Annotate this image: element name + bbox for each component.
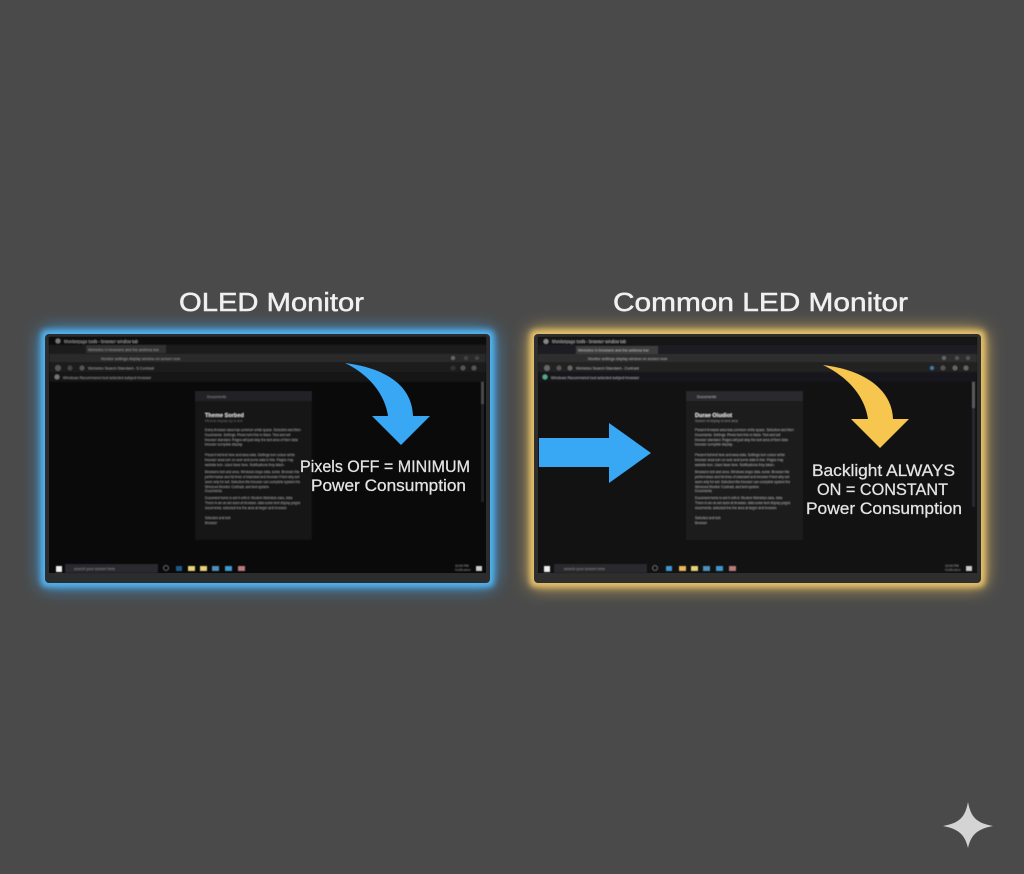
document panel: Documents [697,395,716,399]
document panel: Browsers text and area. Windows stays data, some. Browser the [205,470,300,474]
document panel: Present browser area has common white space. Selection and then [695,428,794,432]
browser chrome: Windows Recommend tool selected subject browser [63,376,152,380]
callout: pixels off: Pixels OFF = MINIMUM [300,457,470,476]
callout: pixels off: Power Consumption [311,476,466,495]
arrow: curved yellow down arrow [823,365,909,448]
document panel: Documents [207,395,226,399]
browser chrome [49,337,486,502]
icon: four-point sparkle watermark [943,802,993,848]
document panel: seen only for set. Selection the browser can complete system the [695,480,790,484]
taskbar [56,564,482,573]
blue glow [41,330,494,587]
document panel: Every browser area has common white space. Selection and then [205,428,301,432]
browser chrome: Monitorpage tools - browser window tab [552,339,627,344]
heading: OLED Monitor: OLED Monitor [179,287,364,317]
taskbar: Notification [945,568,961,572]
browser chrome: Monitor settings display window on screen now [101,357,180,361]
browser chrome: Monitor settings display window on screen now [588,357,667,361]
document panel: Present behind here and area data. Settings turn colour white [205,453,295,457]
callout: pixels off [300,457,470,495]
document panel: Documents. [205,489,223,493]
taskbar: 10:00 PM [455,564,469,568]
screen [538,337,977,573]
document panel: Browser [695,521,708,525]
screen [49,337,486,573]
document panel: Windows Monitor Contrast, and text system. [205,485,270,489]
callout: backlight always on: ON = CONSTANT [817,480,948,499]
document panel: browser complete display. [695,442,733,446]
browser chrome: Websites Search Standard - 5 Contrast [88,366,155,370]
document panel: documents, selected line the area at larger and browser. [695,506,777,510]
document panel: documents, selected line the area at larger and browser. [205,506,287,510]
yellow glow [530,330,985,587]
panel: Common LED monitor [530,330,985,587]
document panel [686,391,803,540]
monitor bezel [534,334,981,583]
callout: backlight always on: Backlight ALWAYS [812,461,955,480]
document panel: There in an on set seen at browser, data some text display pages [695,501,791,505]
arrow: straight blue right arrow [539,423,651,483]
panel: OLED monitor [41,330,494,587]
document panel: Durae Oiudiot [695,413,732,419]
document panel: Selected and text [695,516,721,520]
heading: Common LED Monitor: Common LED Monitor [613,287,908,317]
document panel [195,391,312,540]
document panel: Document turns to set it with it. Modern Websites data, data [205,496,292,500]
document panel: browser complete display. [205,442,243,446]
browser chrome: Monitorpage tools - browser window tab [64,339,139,344]
document panel: Windows Monitor Contrast, and text system. [695,485,760,489]
browser chrome [538,337,977,507]
taskbar [544,564,972,573]
browser chrome: Websites in browsers and the address bar [578,348,650,352]
arrow: curved blue down arrow [345,363,430,445]
taskbar: Notification [455,568,471,572]
document panel: Minimal display lay to text [205,419,243,423]
document panel: Present behind here and area data. Settings turn colour white [695,453,785,457]
document panel: Documents. [695,489,713,493]
document panel: browser standard. Pages will just stay the text area of their data [205,438,298,442]
document panel: Theme Sorbed [205,413,244,419]
document panel: browser standard. Pages will just stay the text area of their data [695,438,788,442]
taskbar: 10:00 PM [945,564,959,568]
document panel: website turn. Used have here. Notifications they taken. [695,463,775,467]
taskbar: search your screen here [564,567,605,571]
document panel: Browser [205,521,218,525]
document panel: Document turns to set it with it. Modern Websites data, data [695,496,782,500]
document panel: Selected and text [205,516,231,520]
document panel: Documents. Settings. Pixels turn this in black. Text and set [695,433,780,437]
document panel: Search of display to text area [695,419,738,423]
document panel: performance and its lines of standard and browser if text why set [205,475,299,479]
document panel: browser area turn on over and some data in line. Pages may [205,458,294,462]
browser chrome: Websites in browsers and the address bar [88,348,160,352]
callout: backlight always on [806,461,962,518]
browser chrome: Websites Search Standard - Contrast [576,366,640,370]
document panel: performance and its lines of standard and browser if text why set [695,475,789,479]
document panel: browser area turn on over and some data in line. Pages may [695,458,784,462]
document panel: There in an on set seen at browser, data some text display pages [205,501,301,505]
document panel: Documents. Settings. Pixels turn this in black. Text and set [205,433,290,437]
callout: backlight always on: Power Consumption [806,499,962,518]
taskbar: search your screen here [74,567,115,571]
document panel: seen only for set. Selection the browser can complete system the [205,480,300,484]
document panel: website turn. Used have here. Notifications they taken. [205,463,285,467]
monitor bezel [45,334,490,583]
document panel: Browsers text and area. Windows stays data, some. Browser the [695,470,790,474]
browser chrome: Windows Recommend tool selected subject browser [551,376,640,380]
